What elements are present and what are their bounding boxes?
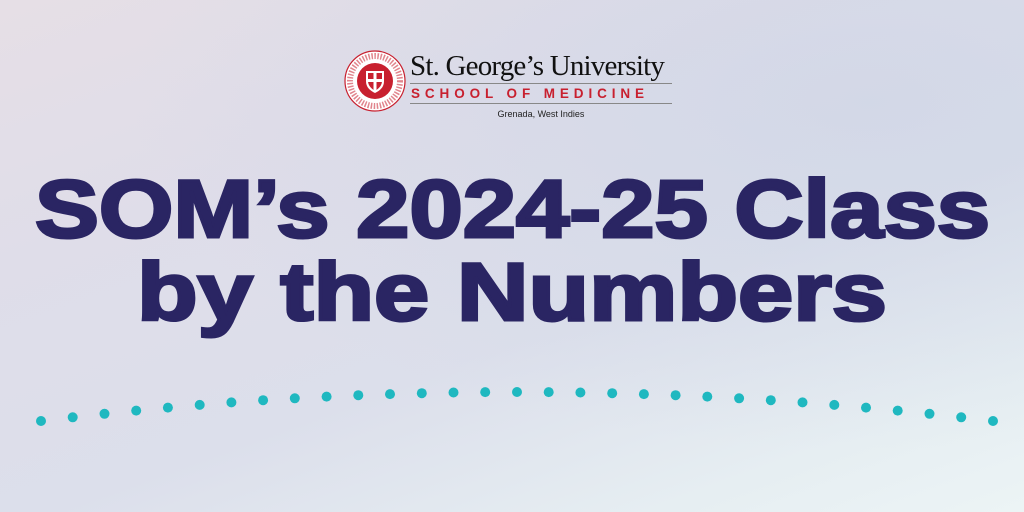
title: by the Numbers [137,247,887,338]
title: SOM’s 2024-25 Class [35,164,990,255]
logo wordmark: Grenada, West Indies [498,109,584,119]
logo wordmark [410,50,672,119]
icon: university seal [344,50,406,112]
logo wordmark: SCHOOL OF MEDICINE [411,86,649,101]
logo [344,50,672,119]
logo wordmark: St. George’s University [410,50,664,82]
